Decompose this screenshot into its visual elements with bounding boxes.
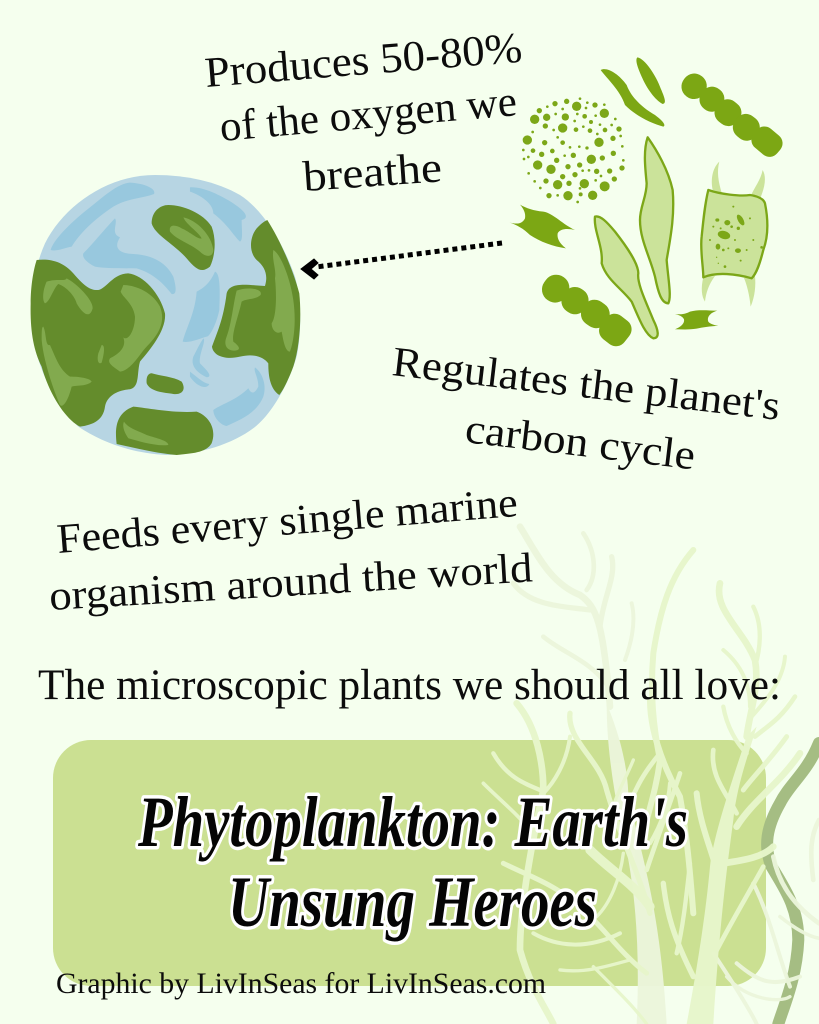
panel: title background bbox=[53, 740, 766, 986]
title bbox=[137, 782, 688, 942]
icon: earth globe bbox=[31, 175, 300, 455]
text: produces oxygen: breathe bbox=[301, 144, 443, 201]
continent highlights bbox=[42, 217, 295, 445]
subheading: The microscopic plants we should all love: bbox=[38, 662, 781, 709]
ocean bbox=[31, 175, 300, 455]
text: feeds marine life: Feeds every single marine bbox=[55, 480, 519, 563]
text: carbon cycle: Regulates the planet's bbox=[390, 339, 783, 430]
plankton: large pale diatoms bbox=[595, 137, 767, 338]
title: Phytoplankton: Earth's bbox=[137, 782, 688, 862]
title: Unsung Heroes bbox=[228, 862, 597, 942]
plankton: spines on large diatom bbox=[702, 162, 765, 307]
plankton: diatom chains bbox=[537, 69, 787, 351]
text: produces oxygen: Produces 50-80% bbox=[203, 25, 524, 97]
text: carbon cycle: carbon cycle bbox=[463, 406, 698, 479]
plankton: inner speckles bbox=[709, 206, 763, 268]
text: produces oxygen: of the oxygen we bbox=[218, 78, 519, 151]
icon: phytoplankton cluster bbox=[509, 57, 787, 351]
text: feeds marine life bbox=[48, 480, 534, 620]
plankton: slim diatoms bbox=[509, 57, 718, 329]
text: carbon cycle bbox=[390, 339, 783, 479]
ocean highlights bbox=[51, 183, 265, 426]
text: feeds marine life: organism around the world bbox=[48, 545, 534, 620]
text: produces oxygen bbox=[203, 25, 524, 201]
plankton: dotted sphere bbox=[522, 97, 625, 203]
continents bbox=[31, 205, 300, 455]
seaweed decoration bbox=[483, 527, 819, 1024]
arrow: from phytoplankton to earth bbox=[301, 243, 502, 279]
footer credit: Graphic by LivInSeas for LivInSeas.com bbox=[56, 967, 546, 1000]
